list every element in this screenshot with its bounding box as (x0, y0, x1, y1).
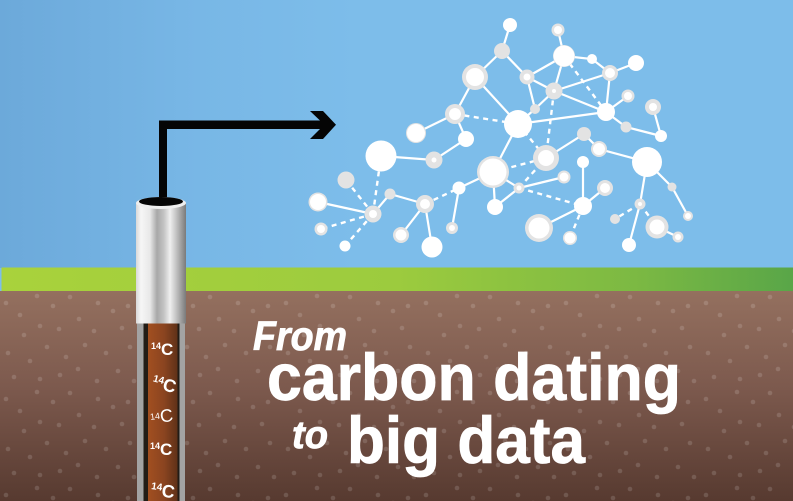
pipe rim (136, 197, 186, 209)
carbon 14 label 5: 14 (150, 481, 163, 494)
carbon 14 label 2: 14 (152, 373, 166, 387)
carbon 14 label 1: 14 (151, 341, 161, 351)
title word: From: From (253, 313, 347, 359)
soil ground (0, 291, 793, 501)
carbon 14 label 4: 14 (150, 441, 160, 451)
title line: big data: big data (347, 403, 586, 477)
sediment core pipe (136, 197, 186, 501)
carbon 14 label 3: 14 (149, 411, 161, 422)
carbon 14 label 3: C (159, 405, 174, 427)
network nodes (308, 18, 693, 258)
lower pipe walls (137, 320, 185, 501)
core sleeve (144, 320, 180, 501)
grass strip (2, 268, 793, 291)
dashed network links (321, 56, 657, 246)
title (253, 313, 681, 477)
carbon 14 label 1: C (161, 340, 173, 359)
title word: to: to (292, 414, 328, 457)
carbon 14 label 2: C (161, 374, 178, 397)
network diagram (308, 18, 693, 258)
arrow from pipe to network (159, 111, 336, 204)
pipe opening (139, 197, 183, 206)
carbon 14 label 4: C (160, 440, 172, 459)
solid network links (318, 25, 688, 247)
core sample (148, 320, 178, 501)
title line: carbon dating: carbon dating (267, 340, 681, 414)
upper pipe sleeve (136, 203, 186, 324)
sky background (0, 0, 793, 268)
